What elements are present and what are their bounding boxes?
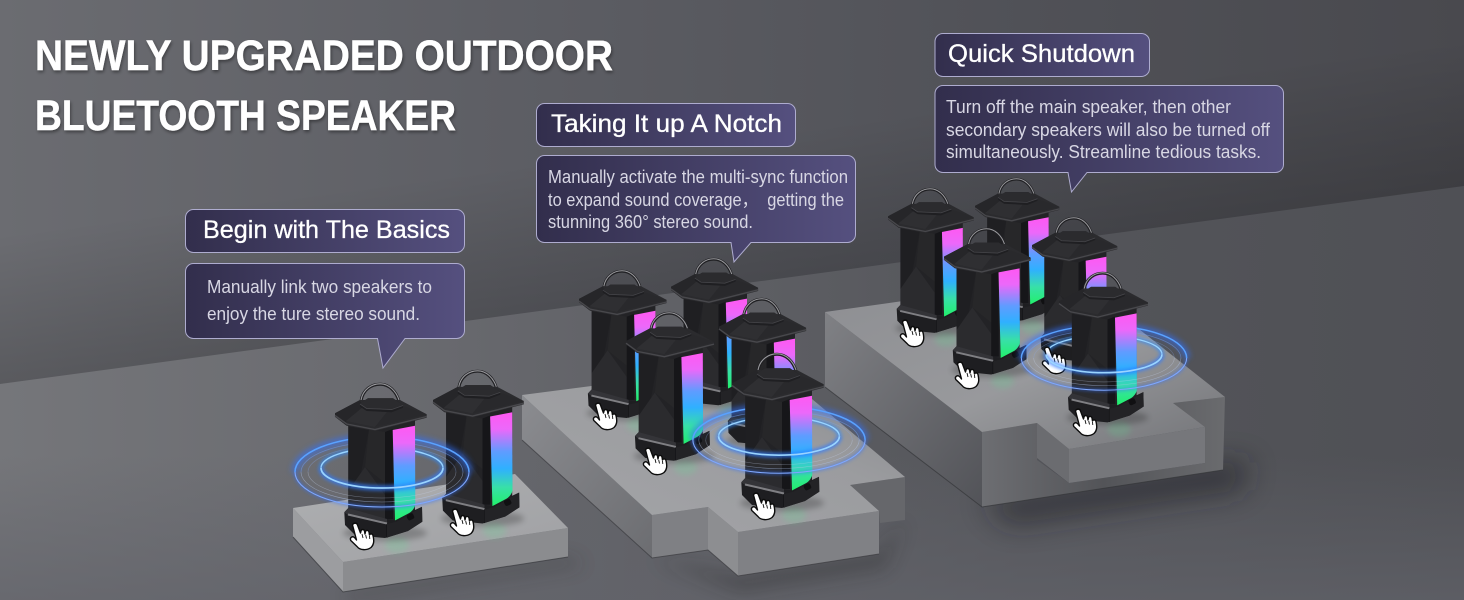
- callout body: stunning 360° stereo sound.: [548, 212, 753, 232]
- hand icon: front left: [955, 362, 979, 389]
- hand icon: main: [1073, 409, 1097, 436]
- callout body: secondary speakers will also be turned off: [946, 120, 1271, 140]
- group three: speakers and touch hands: [888, 179, 1187, 437]
- callout body: Manually link two speakers to: [207, 277, 432, 297]
- callout heading: [536, 104, 796, 146]
- hand icon: back left: [593, 403, 617, 430]
- title: [35, 32, 613, 140]
- platform shadows: [343, 462, 1250, 600]
- speaker: back left: [888, 189, 974, 347]
- speaker: secondary: [433, 371, 524, 538]
- speaker: back centre: [975, 179, 1060, 334]
- group two: speakers and touch hands: [579, 259, 865, 523]
- sound ring: back half: [693, 407, 865, 440]
- callout heading: Quick Shutdown: [948, 40, 1135, 68]
- speaker: main front: [732, 354, 824, 523]
- platform: group one: [293, 474, 568, 592]
- background: floor: [0, 186, 1464, 600]
- platform: group three: [825, 277, 1225, 507]
- sound ring: front half: [693, 436, 865, 473]
- hand icon: main: [350, 523, 374, 550]
- hand icon: main: [751, 493, 775, 520]
- speaker: back centre: [671, 259, 758, 420]
- speaker: main: [335, 384, 427, 553]
- callout body: to expand sound coverage， getting the: [548, 190, 844, 210]
- speaker: back right: [1032, 218, 1118, 375]
- callout body: [536, 156, 856, 262]
- callout body: [186, 264, 464, 368]
- callout body: Turn off the main speaker, then other: [946, 97, 1231, 117]
- callout heading: [186, 210, 464, 252]
- callout heading: [935, 34, 1150, 76]
- speaker: back left: [579, 271, 667, 432]
- callout: Quick Shutdown: [935, 34, 1284, 192]
- sound ring: front half: [1021, 354, 1187, 390]
- speaker: front left: [626, 313, 714, 475]
- callout heading: Begin with The Basics: [203, 216, 450, 244]
- callout body: [935, 86, 1284, 192]
- hand icon: secondary: [450, 509, 474, 536]
- speaker: main front: [1059, 273, 1148, 437]
- title: NEWLY UPGRADED OUTDOOR: [35, 32, 613, 80]
- sound ring: back half: [1021, 326, 1187, 358]
- hand icon: back left: [900, 320, 924, 347]
- speaker: back right: [719, 299, 806, 460]
- title: BLUETOOTH SPEAKER: [35, 92, 456, 140]
- hand icon: front left: [643, 448, 667, 475]
- callout body: Manually activate the multi-sync function: [548, 167, 848, 187]
- sound ring: front half: [295, 468, 469, 507]
- speaker: front left: [944, 229, 1031, 389]
- sound ring: back half: [295, 437, 469, 472]
- group one: speakers and touch hands: [295, 371, 524, 553]
- background: wall: [0, 0, 1464, 400]
- callout body: enjoy the ture stereo sound.: [207, 304, 420, 324]
- callout: Begin with The Basics: [186, 210, 464, 368]
- callout: Taking It up A Notch: [536, 104, 856, 262]
- platform: group two: [522, 363, 905, 576]
- callout heading: Taking It up A Notch: [551, 110, 782, 138]
- hand icon: back right: [1042, 347, 1066, 374]
- callout body: simultaneously. Streamline tedious tasks.: [946, 142, 1261, 162]
